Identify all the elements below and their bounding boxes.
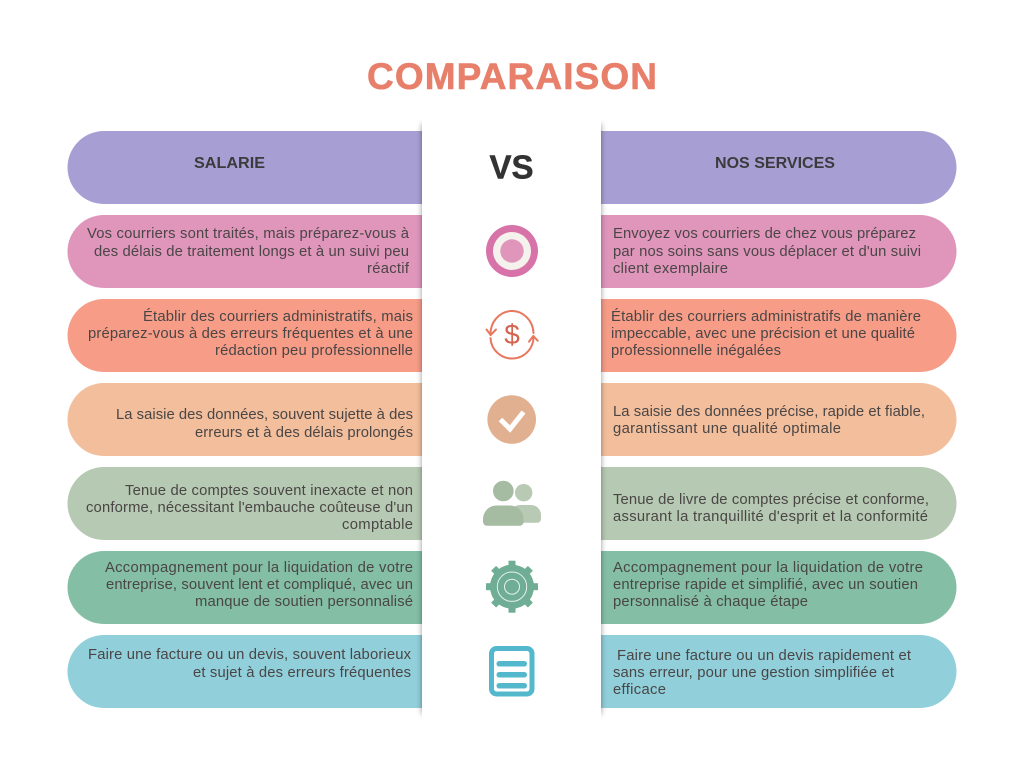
row: liquidation salarie [68,551,422,624]
row: comptes salarie [68,467,422,540]
row: facture salarie [68,635,422,708]
panel: left column SALARIE [68,131,422,708]
row: comptes salarie: conforme, nécessitant l'embauche coûteuse d'un [86,500,413,516]
row: saisie salarie: La saisie des données, souvent sujette à des [116,407,413,423]
row: courriers salarie [68,215,422,288]
row: comptes salarie: comptable [342,517,413,533]
icon: gear [486,561,538,613]
row: facture services [601,635,956,708]
row: facture services: efficace [613,682,666,698]
row: liquidation salarie: Accompagnement pour la liquidation de votre [105,560,413,576]
panel: center column [422,116,601,726]
header pill: NOS SERVICES: NOS SERVICES [715,155,835,172]
header pill: NOS SERVICES [601,131,956,204]
row: courriers administratifs salarie: préparez-vous à des erreurs fréquentes et à une [88,326,413,342]
row: comptes services: Tenue de livre de comptes précise et conforme, [613,492,929,508]
icon: dollar cycle [486,311,538,359]
row: saisie services: La saisie des données précise, rapide et fiable, [613,404,925,420]
icon: document list [492,648,532,694]
row: courriers administratifs services [601,299,956,372]
icon: people [483,481,541,526]
row: courriers salarie: Vos courriers sont traités, mais préparez-vous à [87,226,410,242]
row: courriers services: client exemplaire [613,261,728,277]
row: saisie salarie: erreurs et à des délais prolongés [195,425,413,441]
row: comptes services: assurant la tranquillité d'esprit et la conformité [613,509,928,525]
row: liquidation services [601,551,956,624]
row: facture salarie: Faire une facture ou un devis, souvent laborieux [88,647,412,663]
row: courriers salarie: réactif [367,261,410,277]
row: courriers services: par nos soins sans vous déplacer et d'un suivi [613,244,921,260]
VS label: VS [490,148,534,186]
row: comptes salarie: Tenue de comptes souvent inexacte et non [125,483,413,499]
header pill: SALARIE [68,131,422,204]
row: courriers services [601,215,956,288]
icon: target [486,225,538,277]
row: courriers administratifs salarie: Établir des courriers administratifs, mais [143,308,413,325]
row: comptes services [601,467,956,540]
panel: right column NOS SERVICES [601,131,956,708]
row: facture salarie: et sujet à des erreurs fréquentes [193,665,411,681]
row: facture services: sans erreur, pour une gestion simplifiée et [613,665,894,681]
header pill: SALARIE: SALARIE [194,155,265,172]
icon: dollar cycle: $ [504,319,520,350]
row: courriers administratifs services: Établir des courriers administratifs de manière [611,308,921,325]
row: courriers administratifs services: professionnelle inégalées [611,343,781,359]
row: saisie services [601,383,956,456]
row: saisie services: garantissant une qualité optimale [613,421,841,437]
row: courriers salarie: des délais de traitement longs et à un suivi peu [94,244,409,260]
center panel shadow and background [422,116,601,726]
row: facture services: Faire une facture ou un devis rapidement et [617,648,911,664]
row: saisie salarie [68,383,422,456]
row: liquidation services: entreprise rapide et simplifié, avec un soutien [613,577,918,593]
row: liquidation salarie: entreprise, souvent lent et compliqué, avec un [106,577,413,593]
row: courriers administratifs services: impeccable, avec une précision et une qualité [611,326,915,342]
row: courriers services: Envoyez vos courriers de chez vous préparez [613,226,916,242]
row: liquidation services: Accompagnement pour la liquidation de votre [613,560,923,576]
row: liquidation services: personnalisé à chaque étape [613,594,808,610]
row: courriers administratifs salarie: rédaction peu professionnelle [215,343,413,359]
icon: check mark [487,395,536,444]
row: courriers administratifs salarie [68,299,422,372]
row: liquidation salarie: manque de soutien personnalisé [195,594,413,610]
title: COMPARAISON [367,56,657,97]
